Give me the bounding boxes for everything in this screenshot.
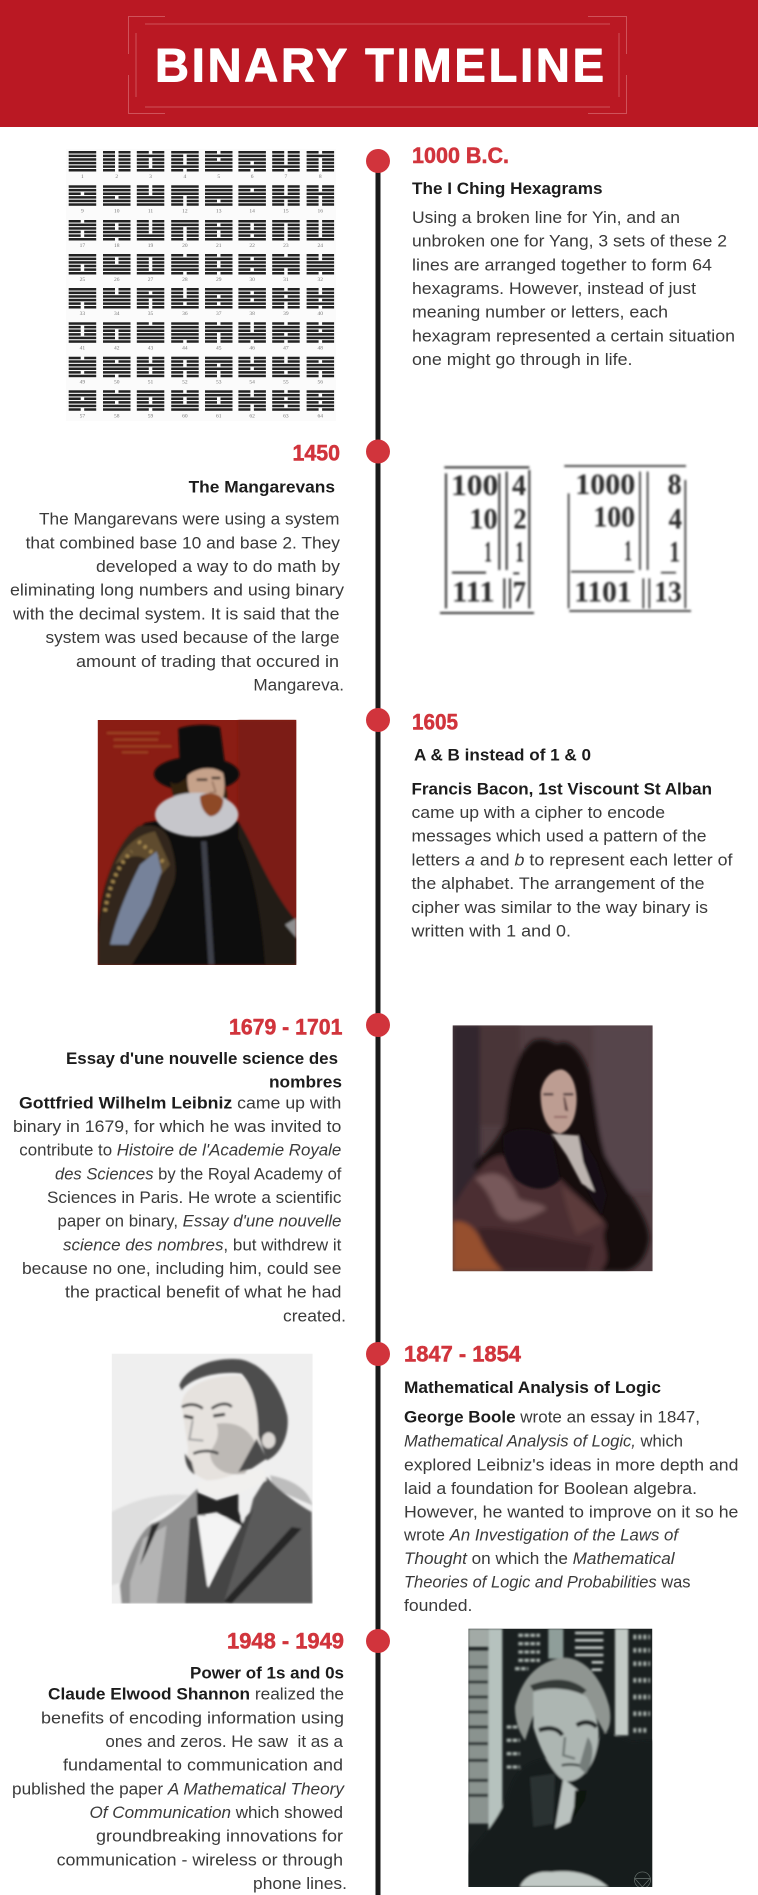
image: I Ching hexagrams chart: 29	[216, 277, 222, 283]
image: I Ching hexagrams chart: 43	[148, 345, 154, 351]
body: George Boole wrote an essay in 1847,	[404, 1409, 700, 1427]
body: meaning number or letters, each	[412, 304, 668, 322]
wig front locks	[503, 1129, 560, 1189]
image: I Ching hexagrams chart: 16	[318, 208, 323, 214]
text block: 1605	[410, 709, 733, 940]
body: the alphabet. The arrangement of the	[412, 875, 704, 893]
heading: nombres	[269, 1074, 342, 1092]
image: Mangarevan number tables: 100	[451, 470, 498, 502]
body: wrote An Investigation of the Laws of	[403, 1527, 680, 1545]
body: cipher was similar to the way binary is	[412, 899, 708, 917]
image: I Ching hexagrams chart: 7	[285, 174, 288, 180]
year: 1948 - 1949	[227, 1628, 344, 1653]
body: Of Communication which showed	[90, 1804, 343, 1822]
image: I Ching hexagrams chart: 33	[80, 311, 85, 317]
image: I Ching hexagrams chart: 49	[80, 380, 85, 386]
year: 1450	[292, 440, 340, 465]
body	[403, 1409, 738, 1615]
body: However, he wanted to improve on it so he	[404, 1503, 738, 1521]
body: Mathematical Analysis of Logic, which	[404, 1433, 683, 1451]
image: Mangarevan number tables: 7	[513, 577, 526, 609]
image: I Ching hexagrams chart: 22	[249, 243, 255, 249]
image: portrait of Francis Bacon	[98, 720, 296, 965]
image: Mangarevan number tables	[440, 466, 691, 613]
body: phone lines.	[253, 1875, 347, 1893]
shirt	[197, 1515, 245, 1587]
image: Mangarevan number tables: 1000	[575, 469, 635, 501]
patterned left sleeve	[98, 825, 176, 965]
year: 1605	[412, 709, 458, 734]
body: hexagrams. However, instead of just	[412, 280, 696, 298]
hair	[515, 1658, 610, 1740]
hat	[154, 725, 239, 837]
body: Claude Elwood Shannon realized the	[48, 1686, 344, 1704]
body: The Mangarevans were using a system	[39, 511, 340, 529]
image: Mangarevan number tables: 1101	[574, 577, 632, 609]
heading: The I Ching Hexagrams	[412, 180, 602, 198]
waistcoat	[185, 1509, 253, 1604]
body: with the decimal system. It is said that the	[12, 605, 339, 623]
image: I Ching hexagrams chart: 39	[283, 311, 289, 317]
image: I Ching hexagrams chart: 8	[319, 174, 322, 180]
body	[98, 820, 266, 965]
body: Using a broken line for Yin, and an	[412, 209, 680, 227]
body: science des nombres , but withdrew it	[63, 1236, 342, 1254]
image: Mangarevan number tables: 2	[513, 503, 527, 535]
body: binary in 1679, for which he was invited to	[13, 1118, 341, 1136]
body: lines are arranged together to form 64	[412, 256, 712, 274]
image: I Ching hexagrams chart: 37	[216, 311, 222, 317]
body	[12, 1686, 347, 1893]
body: because no one, including him, could see	[22, 1260, 341, 1278]
header banner	[0, 0, 758, 127]
text block: 1948 - 1949	[12, 1628, 347, 1893]
image: I Ching hexagrams chart: 25	[80, 277, 85, 283]
timeline marker 1000 B.C.	[366, 149, 390, 173]
face	[541, 1069, 577, 1134]
image: I Ching hexagrams chart: 14	[249, 208, 255, 214]
body: letters a and b to represent each letter of	[412, 851, 733, 869]
hatched background	[112, 1494, 190, 1585]
text block: 1679 - 1701	[13, 1014, 346, 1325]
cravat	[552, 1134, 595, 1192]
image: I Ching hexagrams chart: 23	[283, 243, 289, 249]
image: Mangarevan number tables: 4	[669, 503, 682, 535]
body: laid a foundation for Boolean algebra.	[404, 1480, 697, 1498]
bow tie	[197, 1492, 243, 1527]
body: Sciences in Paris. He wrote a scientific	[47, 1189, 341, 1207]
title: BINARY TIMELINE	[155, 38, 604, 92]
image: I Ching hexagrams chart: 3	[149, 174, 152, 180]
image: I Ching hexagrams chart: 51	[148, 380, 154, 386]
body: fundamental to communication and	[63, 1757, 343, 1775]
image: Mangarevan number tables: 4	[512, 470, 526, 502]
eyes, brows and mouth	[182, 1404, 232, 1409]
image: I Ching hexagrams chart: 32	[318, 277, 323, 283]
body: eliminating long numbers and using binary	[10, 582, 345, 600]
sideburn	[238, 1439, 267, 1472]
body: hexagram represented a certain situation	[412, 327, 735, 345]
body: groundbreaking innovations for	[96, 1828, 344, 1846]
image: I Ching hexagrams chart: 28	[182, 277, 188, 283]
image: I Ching hexagrams chart: 64	[318, 413, 323, 419]
coat	[468, 1732, 652, 1887]
coat	[120, 1489, 207, 1604]
blue satin	[110, 851, 162, 945]
image: Mangarevan number tables: 13	[654, 577, 682, 609]
heading: A & B instead of 1 & 0	[414, 746, 591, 764]
image: I Ching hexagrams chart: 18	[114, 243, 120, 249]
timeline marker 1605	[366, 708, 390, 732]
body: founded.	[404, 1597, 472, 1615]
body: published the paper A Mathematical Theory	[12, 1780, 346, 1798]
image: I Ching hexagrams chart: 55	[283, 380, 289, 386]
image: I Ching hexagrams chart: 27	[148, 277, 154, 283]
timeline marker 1450	[366, 440, 390, 464]
body	[412, 209, 735, 369]
image: I Ching hexagrams chart: 40	[318, 311, 323, 317]
ruff	[155, 793, 238, 837]
body: benefits of encoding information using	[41, 1709, 344, 1727]
robe	[453, 1156, 607, 1271]
image: I Ching hexagrams chart: 46	[249, 345, 255, 351]
wig back	[473, 1039, 649, 1271]
image: I Ching hexagrams chart: 31	[283, 277, 289, 283]
image: I Ching hexagrams chart: 62	[249, 413, 255, 419]
image: I Ching hexagrams chart: 4	[184, 174, 187, 180]
text block: 1847 - 1854	[403, 1342, 738, 1615]
image: I Ching hexagrams chart: 20	[182, 243, 188, 249]
image: I Ching hexagrams chart: 24	[318, 243, 323, 249]
image: I Ching hexagrams chart: 38	[249, 311, 255, 317]
image: portrait of Leibniz	[453, 1025, 653, 1271]
heading: Power of 1s and 0s	[190, 1665, 344, 1683]
neck and face	[182, 1375, 260, 1480]
body: system was used because of the large	[46, 629, 340, 647]
body	[13, 1094, 346, 1325]
body: the practical benefit of what he had	[65, 1284, 341, 1302]
text block: 1450	[10, 440, 345, 694]
machinery background	[468, 1629, 488, 1647]
year: 1679 - 1701	[229, 1014, 342, 1039]
body: explored Leibniz's ideas in more depth and	[404, 1457, 738, 1475]
timeline marker 1847	[366, 1342, 390, 1366]
heading: Essay d'une nouvelle science des	[66, 1050, 338, 1068]
image: I Ching hexagrams chart: 21	[216, 243, 222, 249]
body: Thought on which the Mathematical	[404, 1550, 676, 1568]
image: Mangarevan number tables: 1	[484, 537, 492, 569]
year: 1847 - 1854	[404, 1342, 522, 1367]
image: Mangarevan number tables: 111	[452, 577, 495, 609]
body: one might go through in life.	[412, 351, 632, 369]
orange sleeve	[453, 1221, 503, 1271]
image: I Ching hexagrams chart: 13	[216, 208, 222, 214]
face	[533, 1689, 599, 1781]
heading: The Mangarevans	[189, 478, 335, 496]
image: portrait of George Boole	[112, 1354, 313, 1604]
timeline marker 1948	[366, 1629, 390, 1653]
image: Mangarevan number tables: 10	[469, 503, 498, 535]
image: I Ching hexagrams chart: 6	[251, 174, 254, 180]
image: I Ching hexagrams chart: 42	[114, 345, 120, 351]
heading: Mathematical Analysis of Logic	[404, 1379, 661, 1397]
hair	[179, 1359, 288, 1460]
image: I Ching hexagrams chart: 45	[216, 345, 222, 351]
hair	[170, 775, 192, 796]
image: I Ching hexagrams chart: 41	[80, 345, 85, 351]
collar	[197, 1469, 267, 1497]
image: I Ching hexagrams chart: 53	[216, 380, 222, 386]
body: developed a way to do math by	[96, 558, 341, 576]
body: came up with a cipher to encode	[412, 804, 665, 822]
image: I Ching hexagrams chart: 61	[216, 413, 222, 419]
year: 1000 B.C.	[412, 143, 509, 168]
body: amount of trading that occured in	[76, 653, 339, 671]
image: I Ching hexagrams chart: 36	[182, 311, 188, 317]
body: Gottfried Wilhelm Leibniz came up with	[19, 1094, 341, 1112]
body: ones and zeros. He saw it as a	[105, 1733, 344, 1751]
beard	[200, 793, 223, 816]
image: I Ching hexagrams chart: 2	[115, 174, 118, 180]
body: Francis Bacon, 1st Viscount St Alban	[412, 780, 712, 798]
body	[10, 511, 345, 694]
watermark logo	[634, 1872, 650, 1888]
image: I Ching hexagrams chart: 60	[182, 413, 188, 419]
body: written with 1 and 0.	[410, 922, 571, 940]
body: Theories of Logic and Probabilities was	[404, 1574, 690, 1592]
image: I Ching hexagrams chart: 1	[81, 174, 84, 180]
image: I Ching hexagrams chart: 54	[249, 380, 255, 386]
image: Mangarevan number tables: 1	[669, 537, 680, 569]
right arm	[238, 821, 296, 965]
image: Mangarevan number tables: 100	[593, 502, 635, 534]
image: I Ching hexagrams chart: 12	[182, 208, 188, 214]
body: communication - wireless or through	[57, 1851, 343, 1869]
image: Mangarevan number tables: 8	[668, 469, 682, 501]
body: contribute to Histoire de l'Academie Royale	[19, 1142, 341, 1160]
face	[185, 766, 227, 799]
image: I Ching hexagrams chart: 48	[318, 345, 323, 351]
image: I Ching hexagrams chart: 17	[80, 243, 85, 249]
body: des Sciences by the Royal Academy of	[55, 1165, 342, 1183]
image: I Ching hexagrams chart: 57	[80, 413, 85, 419]
timeline marker 1679	[366, 1013, 390, 1037]
body: paper on binary, Essay d'une nouvelle	[58, 1213, 341, 1231]
image: I Ching hexagrams chart: 63	[283, 413, 289, 419]
body: messages which used a pattern of the	[412, 828, 706, 846]
image: I Ching hexagrams chart: 56	[318, 380, 323, 386]
image: I Ching hexagrams chart: 47	[283, 345, 289, 351]
body	[410, 780, 733, 940]
image: Mangarevan number tables: 1	[515, 537, 524, 569]
body: unbroken one for Yang, 3 sets of these 2	[412, 233, 727, 251]
image: I Ching hexagrams chart: 15	[283, 208, 289, 214]
body: created.	[283, 1307, 346, 1325]
image: I Ching hexagrams chart: 9	[81, 208, 84, 214]
image: I Ching hexagrams chart: 5	[217, 174, 220, 180]
image: I Ching hexagrams chart: 11	[148, 208, 153, 214]
image: I Ching hexagrams chart	[66, 149, 336, 421]
image: Mangarevan number tables: 1	[624, 536, 632, 568]
image: I Ching hexagrams chart: 35	[148, 311, 154, 317]
image: portrait of Claude Shannon	[468, 1629, 652, 1888]
image: I Ching hexagrams chart: 44	[182, 345, 188, 351]
image: I Ching hexagrams chart: 26	[114, 277, 120, 283]
image: I Ching hexagrams chart: 58	[114, 413, 120, 419]
image: I Ching hexagrams chart: 59	[148, 413, 154, 419]
shirt and tie	[555, 1779, 578, 1829]
image: I Ching hexagrams chart: 50	[114, 380, 120, 386]
timeline spine	[376, 165, 380, 1895]
image: I Ching hexagrams chart: 10	[114, 208, 120, 214]
image: I Ching hexagrams chart: 19	[148, 243, 154, 249]
text block: 1000 B.C.	[412, 143, 735, 369]
image: I Ching hexagrams chart: 34	[114, 311, 120, 317]
hands and cuff	[520, 1871, 608, 1887]
painted inscription	[107, 733, 172, 752]
image: I Ching hexagrams chart: 52	[182, 380, 188, 386]
heading	[66, 1050, 342, 1092]
image: I Ching hexagrams chart: 30	[249, 277, 255, 283]
body: Mangareva.	[253, 676, 344, 694]
body: that combined base 10 and base 2. They	[26, 534, 341, 552]
